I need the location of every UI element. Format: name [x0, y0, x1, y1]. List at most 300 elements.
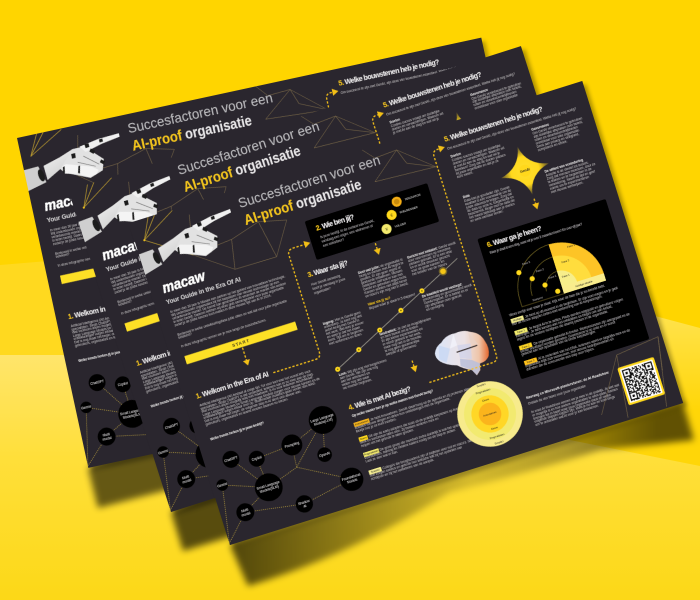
radial chart: Fase 2: [536, 267, 545, 273]
legend item 3: gewerkt aan het opschalen van de beste toepassingen.: [521, 330, 597, 357]
section 1 text: ontwikkelingen volgen elkaar snel op. Multimodale modellen gaan verder dan tekst.: [73, 313, 189, 341]
title: Succesfactoren voor een: [236, 152, 382, 211]
section 1 text: Large Language Models en Small Language Models zorgen voor nieuwe kansen en de: [202, 377, 320, 417]
network: Gemini: [217, 482, 228, 489]
section 5 top: 5. Welke bouwstenen heb je nodig?: [382, 71, 483, 109]
item: doers: [358, 404, 469, 448]
section 5 subline: Om succesvol te zijn met GenAI, zijn deze vier bouwstenen essentieel. Welke heb jij nog nodig?: [447, 107, 577, 151]
block: de autoblock: De kwaliteit wordt vastlegd:: [421, 282, 463, 299]
block: doelen: kunt meten.: [457, 170, 474, 179]
section 5 top: zijn duidelijke afspraken over beleid,: [472, 85, 522, 104]
onion diagram: Sceptici: [476, 382, 486, 388]
shadow: middle sheet: [171, 480, 252, 551]
intro text: betekent?: [118, 299, 133, 307]
block: governance: Governance: [531, 122, 550, 132]
block: doelen: Continu succes vraagt om duidelijke: [451, 143, 501, 162]
section 1 text: Artificial Intelligence (AI) bestaat al enige tijd. Tot voor kort was het vooral iets voor: [70, 300, 185, 328]
block: olifant: De olifant van verandering: [544, 158, 584, 174]
block: ingang: het werk. Wel lees je erover: [326, 320, 365, 336]
block: olifant: Zorg dat mensen meedoen, door ze: [546, 162, 596, 181]
section 1 text: Wat voorheen alleen mogelijk was met maatwerk, is nu voor iedereen beschikbaar.: [72, 306, 187, 335]
block: leek: aan GenAI. We zijn ons nog: [339, 365, 378, 380]
section 5 top: Continu succes vraagt om duidelijke: [390, 109, 440, 128]
network: Prompting: [284, 441, 300, 449]
subtitle: Your Guide in the Era Of AI: [165, 276, 242, 306]
legend item 1: Huidige: [513, 316, 523, 323]
block: governance: Denk aan privacy en veiligheid,: [536, 132, 580, 149]
logo: macaw: [43, 189, 91, 215]
item: innovatoren: bouwen nieuwe dingen en delen hun ontdekkingen met de organisatie.: [354, 397, 451, 430]
legend item 4: organisatie blijft zich vernieuwen, met nieuwe bedrijfsmodellen en: [525, 337, 615, 369]
block: doet wat jullie: gestuurde initiatieven. Mensen: [361, 268, 403, 285]
network: AI: [303, 504, 307, 508]
heading 2 text: Is jouw bedrijf, in de context van GenAI,: [320, 219, 375, 239]
legend item 1: hier de eerste stappen zetten met verkenning van AI-toepassingen.: [512, 294, 603, 327]
block: doelen: Doelen: [450, 152, 462, 159]
sheet background: [71, 46, 537, 512]
star: GenAI: GenAI: [520, 167, 530, 174]
coin: makers: INNOVATOR: [404, 193, 421, 201]
intro text: In meer dan 30 jaar is Macaw een partner op het gebied van innovatieve technologie.: [50, 203, 168, 233]
block: data: en werk vandaar verder.: [470, 209, 504, 223]
legend item 2: Fase 1: [517, 328, 526, 335]
block: governance: compliance en ethiek.: [537, 139, 568, 152]
block: doet wat jullie: Bepaal waar je staat in 5 stappen!: [369, 292, 416, 310]
legend item 2: regels en de verdere richtlijnen die daarbij passen in de organisatie.: [516, 309, 609, 342]
block: data: de data op orde is, toegankelijk en: [467, 195, 514, 213]
onion diagram: Pragmatisten: [475, 387, 491, 396]
legend item 4: Fase 3: [526, 358, 536, 365]
block: doelen: bereiken? Zorg dat de doelen passen: [454, 153, 506, 173]
heading 3: 3. Waar sta jij?: [307, 260, 349, 279]
block: goede intenties: en er wordt structuur gezocht: [410, 253, 450, 270]
block: goede intenties: het beheer van de risico's: [412, 262, 448, 276]
closing text: volgende stappen logisch zijn. Meld je nu aan en kom langs: [534, 395, 616, 424]
block: data: beschermd. Begin met de data die: [468, 198, 516, 216]
onion diagram: Doers: [491, 425, 499, 431]
sheet: back: [17, 38, 486, 468]
legend item 3: Fase 2: [521, 343, 531, 350]
sheet background: [17, 38, 486, 468]
intro text: betekent?: [55, 252, 70, 259]
closing text: om te ontdekken wat AI voor je kan betekenen.: [535, 404, 599, 427]
network: Models(SLM): [123, 412, 143, 420]
radial chart: Fase 1: [548, 274, 557, 280]
item: innovatoren: Bekijk hoe je ze kunt inzetten.: [355, 417, 397, 434]
start bar: [60, 268, 96, 284]
item: volgers: voorbeelden, training en heldere kaders nodig om de stap te zetten.: [364, 428, 457, 460]
network: Shadow: [298, 499, 310, 506]
block: goede intenties: plekken gebruikt. Er is een visie: [409, 249, 453, 266]
intro text: Wij ondersteunen organisaties bij het toepassen van nieuwe technologie op een: [171, 280, 280, 318]
intro text: in ieder bedrijf. Daarom hebben wij deze gids samengesteld voor jouw organisatie: [113, 252, 224, 291]
radial chart: Fase 2: [561, 258, 570, 264]
section 1 text: gebruikers, organisaties en teams moeten daarom nu kiezen.: [75, 325, 160, 348]
intro text: in ieder bedrijf. Daarom hebben wij deze gids samengesteld voor jouw organisatie: [52, 214, 166, 243]
section 5 top: Om succesvol te zijn met GenAI, zijn deze vier bouwstenen essentieel. Welke heb jij nog nodig?: [386, 72, 516, 117]
item: doers: Doers: [359, 435, 368, 441]
arrow: dashed path to section 5: [363, 144, 511, 382]
section 1 text: Dat is nog maar het begin: de volgende stap in AI dient zich alweer aan.: [144, 356, 242, 390]
section 1 text: ontwikkelingen volgen elkaar snel op. Multimodale modellen gaan verder dan tekst.: [203, 381, 316, 420]
section 5 top: [372, 72, 522, 144]
intro text: betekent?: [178, 332, 193, 340]
network: Small Language: [120, 407, 144, 416]
section 5 top: doelen en verwachtingen. Waarom wil: [391, 111, 444, 132]
network: Foundational: [341, 472, 361, 482]
heading 6: 6. Waar ga je heen?: [486, 225, 543, 249]
radial chart: Fase 3: [567, 243, 576, 249]
section 1 text: gebruikers, organisaties en teams moeten daarom nu kiezen.: [205, 397, 289, 427]
radial chart: Fase 3: [522, 260, 531, 266]
coin: followers: WIELRENNER: [399, 205, 418, 215]
intro text: zodat je de juiste keuzes kunt maken in deze nieuwe tijd van AI in 2024.: [53, 221, 153, 246]
QR code: [617, 357, 665, 405]
block: leek: Leek: Wij zijn nog niet toegekomen: [338, 358, 387, 377]
network: Copilot: [251, 455, 262, 462]
section 5 top: 5. Welke bouwstenen heb je nodig?: [338, 59, 440, 88]
heading 1: 1. Welkom in the Era of AI: [136, 338, 210, 368]
trends question: Welke trends herken jij in jouw bedrijf?: [150, 388, 205, 409]
section 1 text: Artificial Intelligence (AI) bestaat al enige tijd. Tot voor kort was het vooral iets voor: [199, 369, 311, 408]
trends question: Welke trends herken jij in jouw bedrijf?: [210, 421, 264, 442]
block: governance: onmisbaar voor elke organisatie.: [535, 128, 580, 145]
network: ChatGPT: [224, 455, 238, 463]
section 5 top: [326, 59, 456, 108]
block: de autoblock: en opvolging: [426, 303, 444, 312]
network: Models: [347, 477, 358, 484]
section 5 top: je met AI aan de slag en wat wil je: [391, 116, 440, 135]
item: volgers: De grote groep die meedoet zodra duidelijk is wat het oplevert. Zij hebben: [379, 417, 480, 452]
item: volgers: Pragmatisten: [363, 448, 380, 457]
section 5 top: rollen en verantwoordelijkheden: [473, 90, 517, 107]
yellow constellation: [82, 177, 112, 209]
coin: volger: VOLGER: [394, 221, 407, 229]
network: modal: [241, 511, 251, 517]
item: doers: Dit zijn de early adopters die tools uit de praktijk toepassen op hun eigen: [368, 404, 467, 439]
network: Multi: [241, 508, 249, 513]
section 3 question: organisatie?: [313, 286, 331, 295]
network: Small Language: [256, 480, 280, 491]
brain: [435, 331, 489, 375]
intro text: Benieuwd in welke ontwikkelingsfase jullie zitten en wat dat voor jullie organisatie: [117, 265, 227, 304]
shadow: front sheet bottom: [230, 403, 694, 586]
radial chart: Fase 1: [561, 273, 571, 279]
block: governance: Om GenAI verantwoord te gebruiken: [532, 116, 583, 135]
block: leek: we moeten beginnen.: [342, 377, 373, 390]
section 4 subline: Op welke manier ben je op welke manier met GenAI bezig?: [351, 389, 434, 418]
sheet: middle: [71, 46, 537, 512]
start bar: [124, 312, 160, 332]
background: right lighter band: [570, 316, 700, 467]
item: twijfelaars: richtlijnen en bij het verbeteren van de aanpak.: [370, 458, 435, 481]
item: twijfelaars: hun zorgen serieus en gebruik hun kritische blik bij het opstellen van: [369, 445, 463, 478]
yellow constellation: [143, 210, 193, 256]
onion diagram: Pragmatisten: [489, 432, 505, 440]
intro text: zodat je de juiste keuzes kunt maken in deze nieuwe tijd van AI in 2024.: [114, 260, 212, 295]
closing text: brengen we in kaart waar jouw organisatie staat en welke: [533, 393, 612, 421]
section 1 text: specialisten. Sinds ChatGPT is dat veranderd: iedereen kan er nu mee aan de slag.: [140, 338, 254, 378]
item: innovatoren: Innovatoren: [355, 419, 369, 427]
block: olifant: te trainen en te begeleiden in de: [547, 167, 592, 184]
block: doet wat jullie: ontdekken zelf wat er kan met: [362, 272, 403, 288]
section 5 top: Governance: [470, 88, 489, 97]
block: neutraal: Er zijn kleine experimenten en: [381, 327, 423, 343]
network: Multi: [182, 474, 190, 480]
block: olifant: met nieuwe werkwijzen.: [551, 180, 584, 194]
yellow constellation: [30, 129, 62, 157]
block: doet wat jullie: Waar sta jij nu?: [367, 296, 391, 307]
subtitle: Your Guide in the Era Of AI: [46, 201, 124, 224]
intro text: in ieder bedrijf. Daarom hebben wij deze gids samengesteld voor jouw organisatie: [173, 286, 285, 324]
legend item 3: eerste resultaten worden gemeten. Governance is op orde en er wordt: [520, 320, 616, 354]
shadow: back sheet: [88, 440, 190, 508]
block: neutraal: er wordt geleerd in het werk,: [382, 331, 422, 347]
section 3 question: Hoe GenAI aanwezig: [311, 274, 341, 287]
arrow: start to section 1: [239, 347, 251, 366]
block: doelen: je met AI aan de slag en wat wil je: [452, 151, 501, 169]
block: ingang: Ingang: Hier is GenAI geen: [322, 310, 361, 326]
network: modal: [182, 478, 192, 484]
arrow: to section 4: [409, 360, 419, 373]
item: twijfelaars: Sceptici: [370, 468, 381, 474]
radial chart: Startpunt: [532, 295, 544, 302]
item: volgers: Laat ze zien wat er kan.: [365, 450, 399, 464]
intro text: verantwoorde manier. De komst van generatieve AI verandert de manier van werken: [172, 281, 287, 321]
item: innovatoren: [353, 385, 478, 434]
section 1 text: Dat is nog maar het begin: de volgende stap in AI dient zich alweer aan.: [74, 319, 174, 344]
legend item 3: [519, 312, 633, 357]
block: leek: aan het oriënteren en: [340, 371, 371, 384]
shadow: middle sheet edge: [72, 49, 627, 515]
legend item 2: trainingen. Je bent kansen aan het ontdekken en begint ook aan beleid,: [515, 304, 613, 339]
network: modal: [102, 436, 112, 441]
intro text: verantwoorde manier. De komst van generatieve AI verandert de manier van werken: [51, 210, 168, 239]
title: [238, 157, 380, 226]
network: [157, 418, 208, 510]
arrow: to section 3: [372, 242, 382, 256]
section 1 text: Dat is nog maar het begin: de volgende stap in AI dient zich alweer aan.: [204, 389, 302, 423]
block: neutraal: maar nog niet in de breedte.: [383, 334, 423, 350]
block: data: kwaliteit is een voorwaarde om de: [465, 188, 512, 206]
legend item 2: Je begint AI in te zetten. Pilots worden opgepakt en gebruikers volgen: [528, 297, 624, 331]
intro text: In deze infographic nemen we je mee langs de succesfactoren.: [57, 245, 145, 268]
block: de autoblock: GenAI ingezet. Er is beleid en er: [424, 288, 469, 305]
section 1 text: specialisten. Sinds ChatGPT is dat veranderd: iedereen kan er nu mee aan de slag.: [200, 372, 314, 411]
legend item 4: diensten die de concurrentie een stap voor blijven.: [526, 347, 595, 372]
heading 4: 4. Wie is met AI bezig?: [348, 386, 412, 412]
logo: macaw: [100, 235, 148, 264]
block: doet wat jullie: [357, 257, 416, 310]
intro text: Benieuwd in welke ontwikkelingsfase jullie zitten en wat dat voor jullie organisatie: [177, 299, 288, 337]
section 5 top: onmisbaar voor elke organisatie: [474, 93, 519, 111]
shadow: front sheet edge: [133, 84, 687, 548]
logo: macaw: [160, 267, 208, 297]
block: governance: rollen en verantwoordelijkheden: [534, 125, 578, 142]
title: organisatie: [294, 176, 364, 213]
block: ingang: actief bezig met GenAI in: [324, 318, 360, 333]
block: data: juiste uitkomst te krijgen. Zorg dat: [465, 192, 512, 210]
title: AI-proof: [242, 197, 296, 229]
arrow: dashed path to section 2: [239, 239, 344, 373]
section 5 top: Om succesvol te zijn met GenAI, zijn deze vier bouwstenen essentieel. Welke heb jij nog nodig?: [340, 63, 473, 95]
section 3 question: bezit je vandaag in jouw: [312, 277, 346, 291]
legend item 1: [510, 286, 619, 327]
coin: followers: €: [390, 212, 394, 218]
legend item 3: De organisatie gebruikt AI breder. Werkprocessen zijn aangepast en de: [533, 312, 630, 346]
robot hand: [74, 176, 171, 243]
block: data: Data kan je goudader zijn. Goede: [464, 185, 510, 203]
intro text: In meer dan 30 jaar is Macaw een partner op het gebied van innovatieve technologie.: [110, 241, 226, 282]
subtitle: Your Guide in the Era Of AI: [105, 243, 182, 274]
legend item 4: [524, 328, 633, 372]
robot hand: [135, 209, 231, 276]
heading 2: 2. Wie ben jij?: [315, 214, 355, 233]
network: OpenAI: [319, 451, 331, 458]
section 5 top: Doelen: [389, 117, 401, 124]
coin: followers: [385, 202, 419, 221]
block: doet wat jullie: GenAI en gebruiken eigen tools.: [363, 274, 407, 292]
block: doet wat jullie: groeien. Er zijn geen regels of: [360, 265, 401, 282]
network: Copilot: [117, 381, 128, 387]
closing text: er mogelijk is en hoe andere organisaties te werk gaan. Samen: [532, 387, 618, 417]
radial chart: [507, 231, 606, 307]
block: ingang: en weet je dat het eraan: [327, 325, 361, 339]
block: ingang: onderwerp. Je bent nog niet: [323, 314, 362, 329]
block: ingang: komt. Tijd om te beginnen: [328, 328, 364, 343]
legend line: Wees eerlijk over waar je staat. Kijk naar de fase die je nu bereikt hebt.: [509, 284, 606, 317]
block: leek: weten nog niet waar: [341, 374, 371, 387]
item: volgers: [363, 417, 482, 464]
block: ingang: met verkennen en leren.: [329, 332, 363, 346]
block: olifant: verandering. Neem de tijd en geef: [548, 169, 596, 187]
intro text: Benieuwd in welke ontwikkelingsfase jullie zitten en wat dat voor jullie organisatie: [55, 228, 168, 256]
title: [178, 124, 320, 192]
network: Models(LLM): [313, 417, 333, 427]
coin: volger: ¥: [385, 226, 389, 232]
coin: volger: [380, 218, 407, 235]
block: doelen: bij jouw organisatie en dat je ze: [455, 159, 499, 176]
block: goede intenties: Gericht met initiatief: GenAI wordt: [407, 241, 456, 260]
item: innovatoren: Je hebt innovatoren. GenAI staat hoog op de agenda en zij proberen alles uit,: [370, 385, 476, 422]
network: ChatGPT: [90, 379, 104, 386]
onion diagram: Doers: [482, 397, 490, 403]
intro text: verantwoorde manier. De komst van generatieve AI verandert de manier van werken: [112, 248, 226, 288]
robot hand: [24, 133, 120, 192]
start bar: START: [232, 338, 250, 348]
title: Succesfactoren voor een: [126, 89, 274, 136]
heading 1: 1. Welkom in the Era of AI: [195, 371, 270, 401]
closing text: In onze AI Roadshow nemen we je mee in de praktijk. Je ziet wat: [531, 383, 620, 414]
background: lower wave: [0, 355, 700, 600]
arrow: to section 6: [531, 198, 541, 210]
heading 5: 5. Welke bouwstenen heb je nodig?: [443, 106, 544, 144]
shadow: back sheet edge: [21, 41, 556, 471]
section 1 text: Large Language Models en Small Language Models zorgen voor nieuwe kansen en de: [142, 343, 261, 384]
section 1 text: gebruikers, organisaties en teams moeten daarom nu kiezen.: [145, 363, 229, 394]
sheet background: [129, 81, 683, 545]
block: olifant: ruimte om te experimenteren: [549, 175, 590, 191]
block: neutraal: Neutraliteit: Je ziet de mogelijkheden: [379, 317, 432, 337]
intro text: zodat je de juiste keuzes kunt maken in deze nieuwe tijd van AI in 2024.: [174, 293, 272, 327]
block: de autoblock: zijn afspraken over gebruik: [425, 293, 463, 309]
network: ChatGPT: [164, 422, 179, 430]
constellation lines: [188, 150, 667, 418]
item: twijfelaars: [368, 437, 479, 481]
section 1 text: ontwikkelingen volgen elkaar snel op. Multimodale modellen gaan verder dan tekst.: [143, 348, 257, 387]
item: doers: helpen om het gebruik te laten groeien.: [361, 428, 415, 448]
block: de autoblock: procesmatig en gecontroleerd wordt: [423, 283, 472, 302]
closing heading: Ontdek de vier fases voor jouw organisatie: [528, 384, 586, 406]
title: organisatie: [233, 142, 303, 179]
trends question: Welke trends herken jij in jouw bedrijf?: [78, 347, 134, 363]
title: organisatie: [183, 112, 253, 143]
network: Large Language: [310, 413, 334, 424]
block: neutraal: en bent bereid om te testen.: [380, 324, 419, 340]
block: data: het meest bijdraagt aan je doelen: [469, 202, 515, 220]
block: doet wat jullie: Doet wat jullie: de organisatie is: [357, 257, 403, 275]
block: goede intenties: door veel mensen op meerdere: [408, 246, 451, 263]
intro text: In deze infographic nemen we je mee langs de succesfactoren.: [121, 285, 207, 316]
sheet: front: [116, 70, 683, 548]
block: olifant: Adoptie is de sleutel tot succes.: [545, 160, 589, 177]
star: GenAI: [494, 139, 556, 202]
intro text: In deze infographic nemen we je mee langs de succesfactoren.: [181, 318, 267, 349]
maturity line: [314, 258, 479, 372]
constellation lines: [77, 86, 326, 182]
closing heading: Navraag en Microsoft-pionierstoren: de AI Roadshow: [526, 371, 610, 400]
section 6 subline: Waar je staat is een ding, waar wil je over 3 maanden heen? En over vijf jaar?: [489, 222, 583, 255]
intro text: Wij ondersteunen organisaties bij het toepassen van nieuwe technologie op een: [111, 247, 220, 285]
block: doet wat jullie: Kansen worden niet altijd benut: [364, 278, 407, 295]
block: neutraal: aanpak of governance.: [385, 343, 418, 357]
network: Multi: [102, 432, 110, 438]
section 1 text: Wat voorheen alleen mogelijk was met maatwerk, is nu voor iedereen beschikbaar.: [141, 342, 254, 381]
legend item 1: Je bent op dit moment in de beginfase. Er zijn veel vragen en je gaat: [525, 286, 618, 319]
section 1 text: Wat voorheen alleen mogelijk was met maatwerk, is nu voor iedereen beschikbaar.: [201, 375, 314, 414]
constellation lines: [128, 116, 376, 222]
network: Gemini: [81, 404, 92, 411]
item: twijfelaars: Collega's die terughoudend zijn of twijfelen over nut en risico's. Neem: [382, 437, 477, 471]
intro text: Wij ondersteunen organisaties bij het toepassen van nieuwe technologie op een: [50, 208, 162, 236]
block: neutraal: Is nog geen gezamenlijke: [384, 339, 420, 353]
start bar: [184, 322, 298, 364]
background: left lighter band: [0, 255, 120, 360]
network: [80, 374, 146, 466]
title: AI-proof: [130, 127, 185, 154]
section 1 text: specialisten. Sinds ChatGPT is dat veranderd: iedereen kan er nu mee aan de slag.: [71, 303, 187, 332]
intro text: In meer dan 30 jaar is Macaw een partner op het gebied van innovatieve technologie.: [170, 275, 286, 314]
panel: 6 waar ga je heen: [477, 199, 650, 379]
title: Succesfactoren voor een: [175, 118, 321, 178]
block: goede intenties: voor de grote kansen en: [411, 259, 445, 273]
onion diagram: [449, 373, 531, 455]
onion diagram: Innovatoren: [483, 410, 498, 418]
block: doet wat jullie: en risico's zijn nog niet in beeld.: [365, 281, 409, 298]
block: doet wat jullie: bezig en werken met AI begint te: [359, 261, 404, 278]
block: data: Data: [462, 193, 470, 199]
heading 2 text: vandaag een reiger, een wielrenner of: [321, 224, 373, 244]
section 1 text: Large Language Models en Small Language Models zorgen voor nieuwe kansen en de: [72, 308, 193, 338]
block: doelen: doelen en verwachtingen. Waarom wil: [452, 146, 505, 166]
block: governance: zijn duidelijke afspraken over beleid,: [533, 120, 583, 139]
radial chart: Huidige situatie: [575, 279, 594, 288]
item: doers: werk en successen laten zien. Zij trekken anderen mee en: [359, 417, 439, 445]
title: AI-proof: [181, 164, 236, 196]
panel: 2 wie ben jij: [305, 183, 439, 260]
legend item 2: [514, 297, 626, 342]
heading 2 text: een mitrailleur?: [322, 238, 345, 248]
